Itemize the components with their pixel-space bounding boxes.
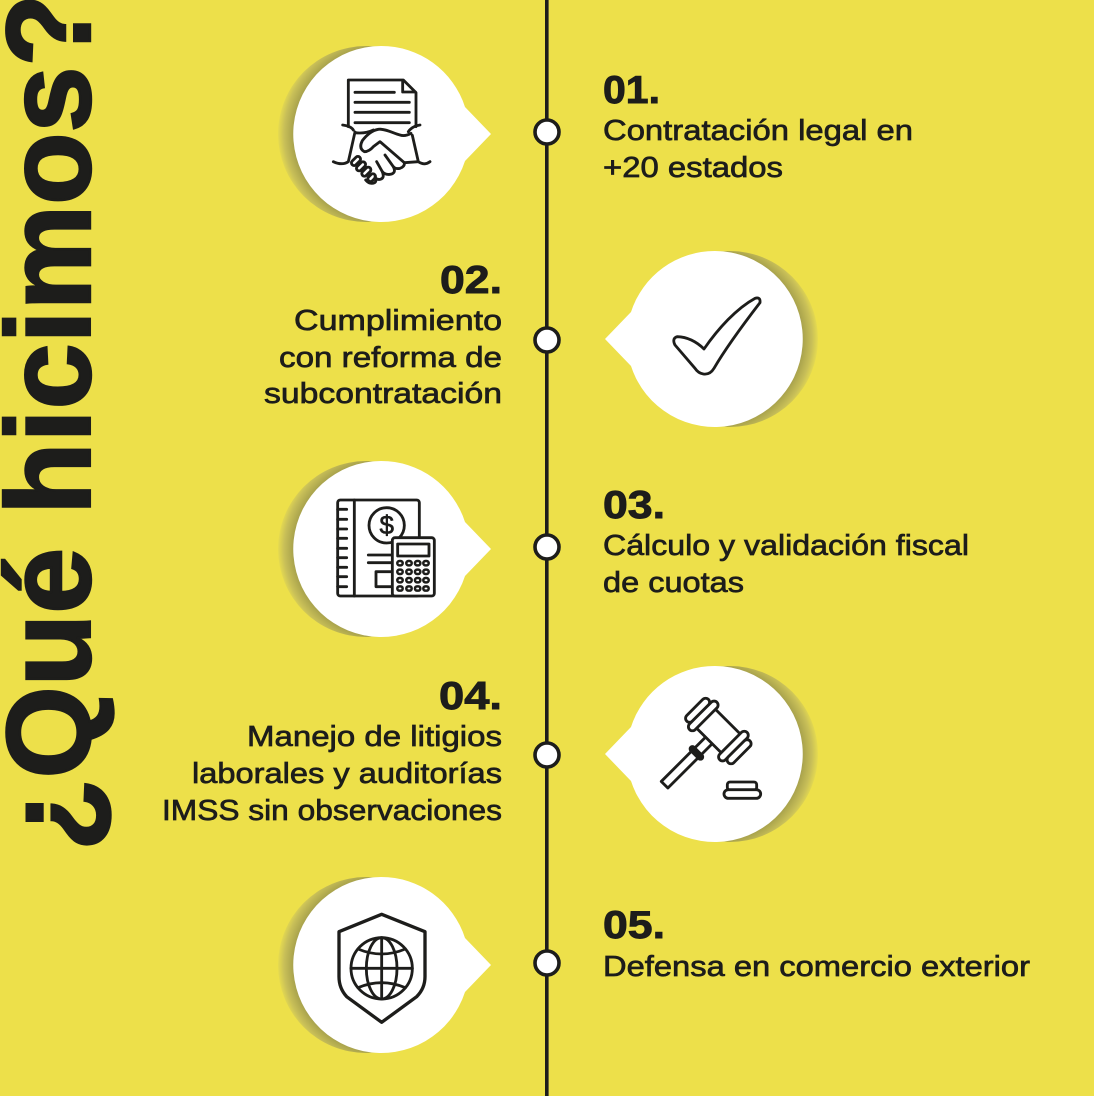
item 3 text: 03. <box>603 484 665 527</box>
item 4 text: laborales y auditorías <box>192 758 502 790</box>
icon: shield with globe <box>339 914 425 1022</box>
bubble 2 <box>605 251 818 427</box>
item 2 text: 02. <box>440 259 502 302</box>
item 3 text: de cuotas <box>603 567 744 599</box>
item 1 text <box>603 69 913 184</box>
item 4 text: Manejo de litigios <box>247 721 502 753</box>
item 2 text <box>264 259 502 410</box>
bubble 1 <box>278 46 491 222</box>
item 2 text: subcontratación <box>264 378 502 410</box>
item 4 text: IMSS sin observaciones <box>162 795 502 827</box>
timeline node 2 <box>535 328 559 352</box>
item 1 text: 01. <box>603 69 660 112</box>
timeline node 1 <box>535 120 559 144</box>
timeline node 4 <box>535 743 559 767</box>
item 5 text <box>603 904 1030 983</box>
item 5 text: Defensa en comercio exterior <box>603 951 1030 983</box>
item 1 text: +20 estados <box>603 152 783 184</box>
icon: document and handshake <box>333 80 430 183</box>
timeline node 5 <box>535 951 559 975</box>
timeline line <box>545 0 549 1096</box>
item 5 text: 05. <box>603 904 665 947</box>
item 3 text: Cálculo y validación fiscal <box>603 530 969 562</box>
bubble 3 <box>278 461 491 637</box>
icon: ledger and calculator <box>338 500 434 596</box>
item 4 text: 04. <box>439 675 502 718</box>
item 2 text: con reforma de <box>279 342 502 374</box>
icon: check mark <box>674 298 760 374</box>
timeline node 3 <box>535 535 559 559</box>
bubble 5 <box>278 877 491 1053</box>
item 4 text <box>162 675 502 827</box>
item 2 text: Cumplimiento <box>294 305 502 337</box>
icon: ledger and calculator: $ <box>379 510 394 540</box>
bubble 4 <box>605 666 818 842</box>
item 3 text <box>603 484 969 599</box>
icon: gavel <box>641 694 761 808</box>
item 1 text: Contratación legal en <box>603 115 913 147</box>
